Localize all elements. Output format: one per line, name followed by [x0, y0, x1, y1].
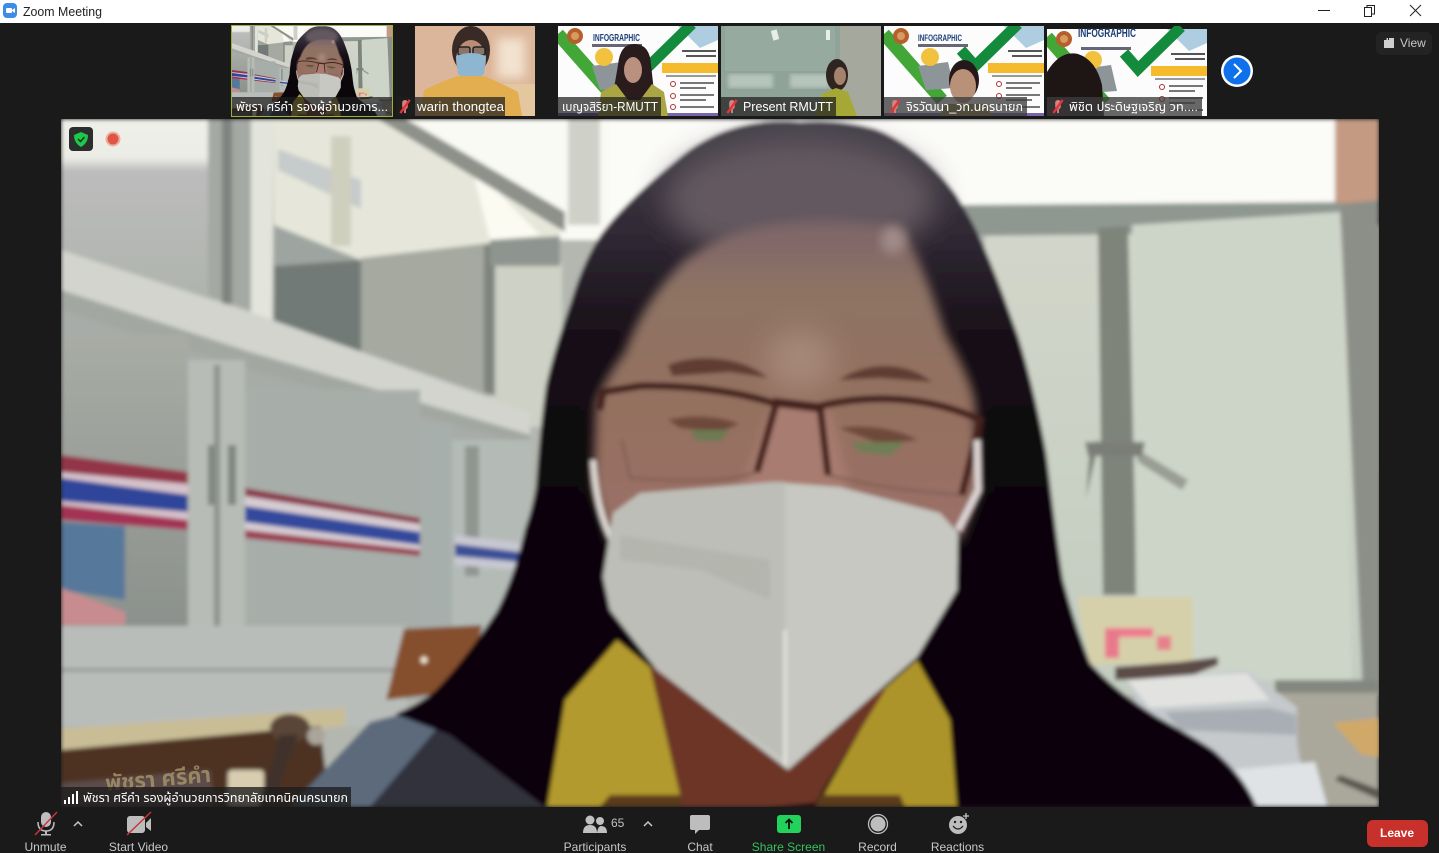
thumbnail: warin thongtea: warin thongtea [416, 100, 504, 114]
toolbar button: reactions [931, 813, 984, 853]
icon: view grid [1384, 38, 1394, 48]
icon: zoom app [3, 3, 17, 18]
toolbar button: record [858, 814, 897, 853]
thumbnail: presenter with poster: INFOGRAPHIC [593, 33, 640, 44]
toolbar button: participants [564, 816, 626, 853]
speaker name label [61, 787, 351, 807]
leave button [1367, 820, 1428, 847]
toolbar button: participants: 65 [611, 816, 625, 830]
toolbar button: share screen [752, 815, 825, 853]
thumbnail: Jirawatthana with poster: INFOGRAPHIC [918, 33, 962, 44]
window title: Zoom Meeting [23, 4, 102, 19]
next page arrow button [1221, 55, 1253, 87]
nameplate text in scene: พัชรา ศรีคำ [104, 762, 212, 796]
speaker name text: พัชรา ศรีคำ รองผู้อำนวยการวิทยาลัยเทคนิคนครนายก [83, 791, 348, 805]
toolbar button: chat [687, 815, 713, 853]
thumbnail: active speaker [232, 26, 392, 116]
toolbar button: unmute [24, 812, 67, 853]
thumbnail: Phichit with poster [1047, 27, 1207, 119]
toolbar button: start video [109, 812, 168, 853]
main video [61, 119, 1380, 807]
thumbnail: Present RMUTT: Present RMUTT [743, 100, 833, 114]
thumbnail: Jirawatthana with poster: จิรวัฒนา_วท.นครนายก [906, 100, 1023, 114]
thumbnail: active speaker: พัชรา ศรีคำ รองผู้อำนวยการ... [236, 100, 388, 114]
view button [1376, 32, 1432, 55]
thumbnail: presenter with poster: เบญจสิริยา-RMUTT [562, 100, 658, 114]
thumbnail: Phichit with poster: พิชิต ประดิษฐเจริญ วท.... [1069, 100, 1198, 114]
icon: recording dot [106, 132, 120, 146]
icon: encryption shield [69, 127, 93, 151]
title bar [0, 0, 1439, 23]
thumbnail: Present RMUTT [721, 26, 881, 116]
thumbnail: Phichit with poster: INFOGRAPHIC [1078, 28, 1136, 40]
leave button: Leave [1380, 826, 1414, 840]
caret: audio options [74, 822, 82, 826]
thumbnail: Jirawatthana with poster [884, 24, 1044, 116]
thumbnail: presenter with poster [558, 24, 718, 116]
toolbar [0, 807, 1439, 853]
view label: View [1400, 36, 1426, 50]
caret: participants options [644, 822, 652, 826]
thumbnail: warin thongtea [396, 26, 535, 116]
window controls [1318, 5, 1421, 16]
icon: signal bars [64, 791, 78, 804]
